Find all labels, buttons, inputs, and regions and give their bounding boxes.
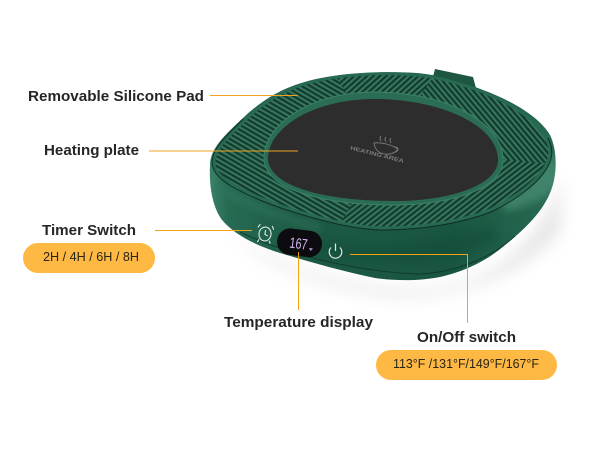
silicone pad bbox=[212, 72, 552, 230]
pad rim bbox=[214, 74, 550, 228]
label: temperature display: Temperature display bbox=[224, 314, 374, 331]
icon: alarm clock bbox=[256, 224, 274, 244]
product: mug warmer bbox=[210, 69, 556, 280]
leader: on/off switch bbox=[350, 254, 468, 323]
pill background bbox=[376, 350, 557, 380]
leader: timer bbox=[155, 230, 252, 232]
drop shadow under product bbox=[235, 175, 562, 296]
icon: power bbox=[329, 244, 342, 258]
label: removable silicone pad: Removable Silicone Pad bbox=[28, 88, 204, 105]
heating plate bbox=[268, 99, 498, 201]
pill text: 2H / 4H / 6H / 8H bbox=[43, 250, 139, 264]
label: heating plate: Heating plate bbox=[44, 142, 139, 159]
pad outer seam bbox=[212, 119, 552, 230]
temperature display bbox=[276, 227, 323, 259]
label: timer switch: Timer Switch bbox=[42, 222, 136, 239]
temperature options pill bbox=[376, 350, 557, 380]
pill text: 113°F /131°F/149°F/167°F bbox=[393, 357, 539, 371]
leader: heating plate bbox=[149, 150, 298, 152]
plate ring bbox=[264, 92, 503, 205]
leader: silicone pad bbox=[210, 94, 298, 96]
heating area text: HEATING AREA bbox=[350, 146, 404, 165]
leader: temperature display bbox=[298, 252, 300, 310]
pad ribs bbox=[216, 75, 548, 226]
icon: cup bbox=[374, 136, 398, 154]
pull tab bbox=[431, 69, 477, 92]
pad base bbox=[214, 74, 550, 228]
display digits: 167 bbox=[289, 235, 308, 254]
unit marker bbox=[309, 248, 313, 251]
timer options pill bbox=[23, 243, 155, 273]
device body bbox=[210, 72, 556, 280]
body shading bbox=[222, 150, 560, 274]
label: on/off switch: On/Off switch bbox=[417, 329, 516, 346]
display window bbox=[276, 227, 323, 259]
pill background bbox=[23, 243, 155, 273]
